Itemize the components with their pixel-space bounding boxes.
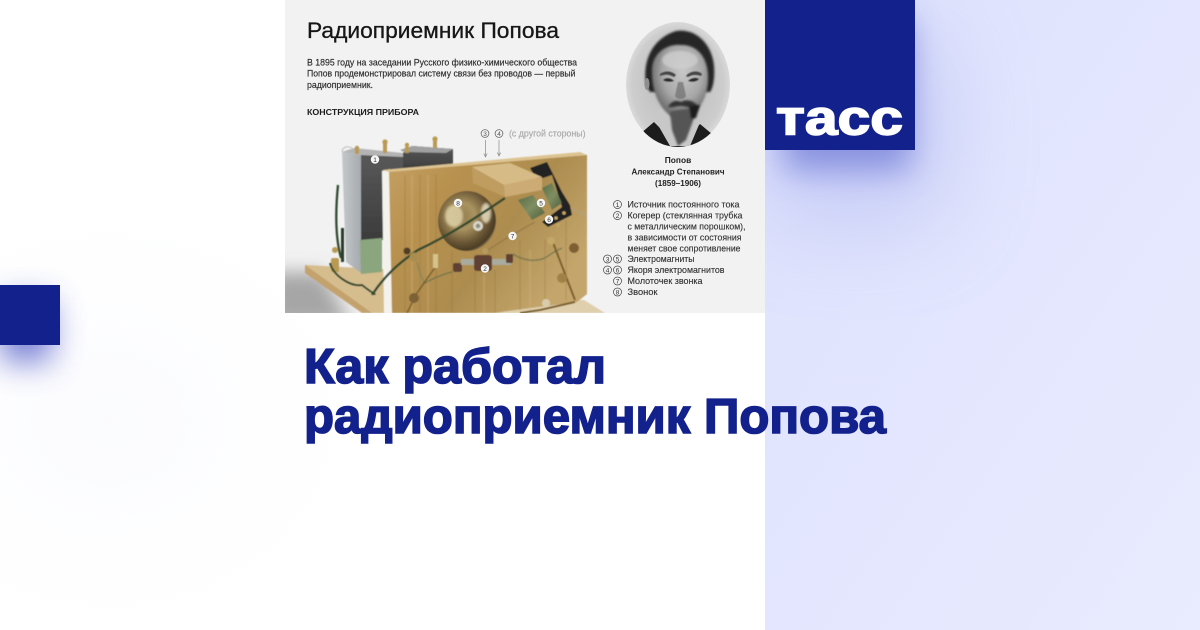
legend markers: 7 (616, 278, 620, 286)
photo part markers: 8 (456, 200, 460, 208)
callout: parts on the other side: 4 (497, 131, 501, 138)
coat (643, 122, 711, 147)
legend: Звонок (628, 287, 658, 297)
board face (389, 155, 587, 313)
legend: с металлическим порошком), (628, 222, 746, 232)
TASS logo: тасс (776, 92, 903, 146)
bell (438, 191, 496, 251)
callout: parts on the other side: 3 (483, 131, 487, 138)
portrait caption: (1859–1906) (655, 178, 701, 188)
legend markers: 1 (616, 202, 620, 209)
base wire (330, 263, 375, 294)
photo part markers: 2 (483, 266, 487, 273)
hair (645, 31, 714, 92)
legend: Электромагниты (628, 254, 694, 264)
decorative square shadow (0, 300, 52, 362)
wooden bracket block (472, 163, 542, 197)
main headline: Как работал (304, 339, 606, 394)
photo part markers: 7 (511, 234, 515, 240)
eyes, nose (660, 71, 702, 99)
legend markers: 2 (616, 213, 620, 220)
face (652, 45, 708, 122)
intro text: В 1895 году на заседании Русского физико-химического общества (307, 58, 578, 68)
hammer rod (488, 222, 535, 250)
legend (604, 200, 746, 297)
board top edge (382, 152, 587, 172)
section heading: КОНСТРУКЦИЯ ПРИБОРА (307, 107, 419, 117)
wire coils and brass hardware (407, 240, 575, 313)
decorative square (0, 285, 60, 345)
photo part markers: 5 (539, 200, 543, 208)
portrait of Popov (626, 22, 730, 150)
floor shadow (285, 262, 356, 313)
wooden base (305, 264, 505, 313)
main headline: радиоприемник Попова (304, 389, 886, 444)
intro text: Попов продемонстрировал систему связи без проводов — первый (307, 68, 576, 78)
legend: в зависимости от состояния (628, 232, 742, 242)
terminals (331, 136, 438, 272)
legend markers: 4 (606, 268, 610, 274)
photo part markers (371, 155, 553, 273)
electromagnet (518, 162, 587, 227)
legend: Источник постоянного тока (628, 200, 740, 210)
logo shadow (770, 20, 940, 220)
main headline (304, 339, 886, 444)
callout: parts on the other side (481, 128, 586, 157)
board edge (382, 169, 392, 313)
green wire (372, 198, 505, 295)
legend markers: 3 (606, 256, 610, 264)
photo part markers: 6 (547, 217, 551, 224)
battery block (331, 136, 453, 274)
infographic panel (270, 0, 765, 325)
legend: Молоточек звонка (628, 276, 702, 286)
legend: Якоря электромагнитов (628, 265, 725, 275)
legend markers (604, 200, 622, 296)
TASS logo (765, 0, 915, 150)
portrait caption (632, 155, 725, 188)
device illustration (285, 136, 605, 313)
photo part markers: 1 (373, 157, 377, 164)
moustache and beard (668, 100, 700, 146)
coherer (453, 254, 513, 272)
wood grain (405, 174, 566, 313)
legend markers: 8 (616, 290, 620, 296)
portrait caption: Александр Степанович (632, 166, 725, 176)
legend: Когерер (стеклянная трубка (628, 210, 742, 220)
portrait caption: Попов (665, 155, 691, 165)
callout: parts on the other side: (с другой стороны) (509, 128, 586, 138)
intro text: радиоприемник. (307, 80, 373, 90)
intro text (307, 58, 578, 90)
infographic title: Радиоприемник Попова (307, 18, 560, 43)
legend markers: 5 (616, 256, 620, 264)
legend markers: 6 (616, 268, 620, 274)
legend: меняет свое сопротивление (628, 244, 740, 254)
